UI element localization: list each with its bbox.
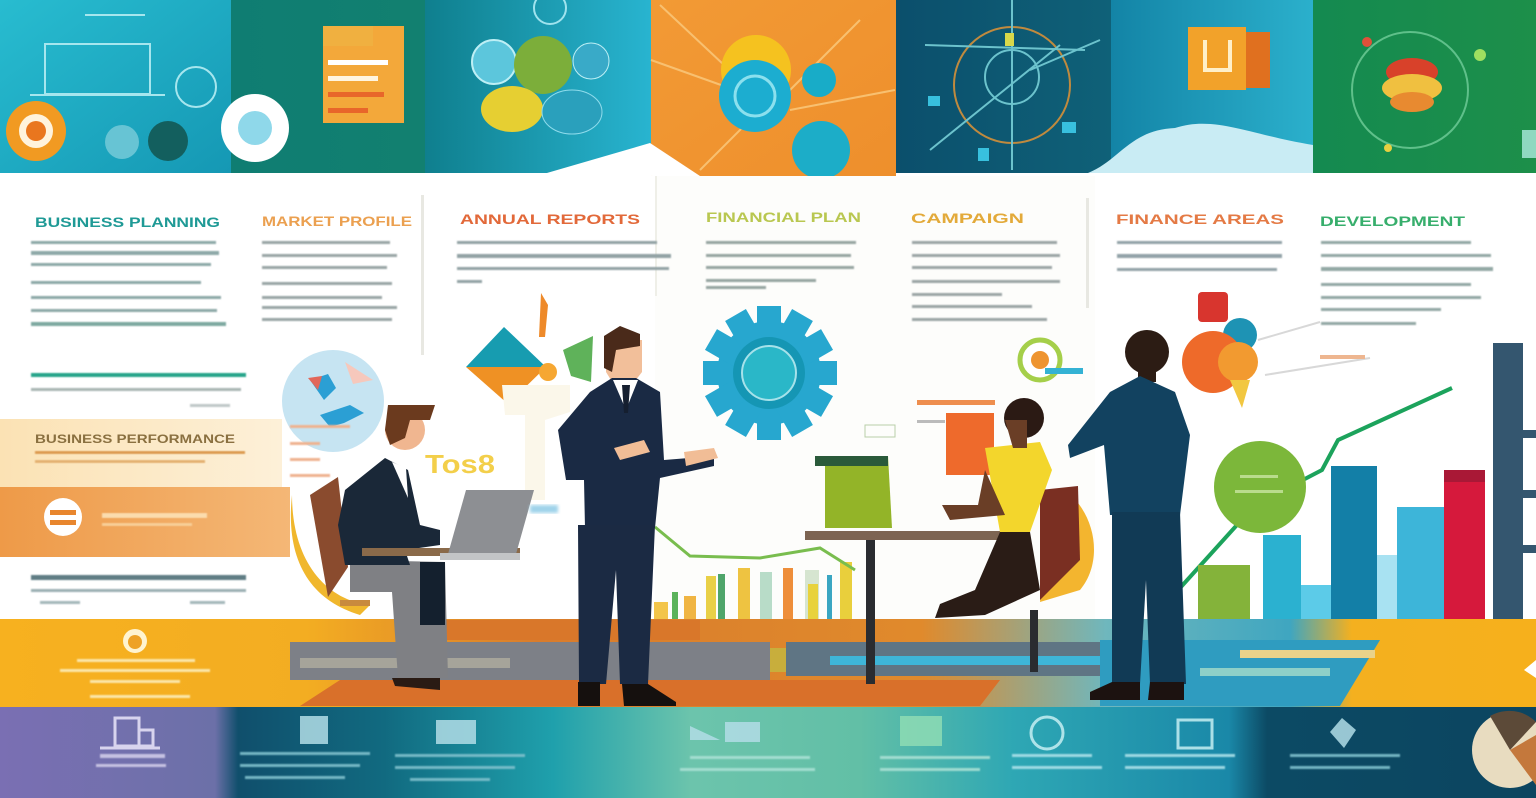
trousers [578, 525, 655, 684]
floor text block with icon [60, 629, 210, 698]
text block under callouts [31, 575, 246, 604]
icon: diamond chart [466, 293, 593, 404]
torso [338, 458, 440, 565]
desk [362, 548, 520, 556]
icon: right cluster infographic [1020, 292, 1370, 408]
column 6: heading and text: FINANCE AREAS [1116, 211, 1284, 227]
cloud [1088, 124, 1313, 173]
icon: orange box [1188, 27, 1270, 90]
white paper sheet edge [540, 143, 700, 176]
icon: venn circles [472, 0, 609, 134]
column 7: heading and text: DEVELOPMENT [1320, 213, 1466, 229]
orange document on stand [865, 400, 995, 475]
head [606, 340, 642, 385]
jacket [1068, 376, 1190, 515]
column 7: heading and text [1320, 213, 1493, 325]
icon: orange badge [6, 101, 66, 161]
figure: standing man back view [1068, 330, 1190, 700]
icon: globe [282, 350, 384, 452]
torso [985, 442, 1052, 532]
figure: seated man with laptop [291, 405, 558, 690]
icon: pie corner [1472, 711, 1536, 788]
green divider with small text [31, 373, 246, 407]
bar chart: small center [654, 527, 855, 626]
column 2: heading and text [262, 213, 412, 321]
figure: standing man in suit [558, 326, 718, 706]
panel: orange callout [0, 487, 290, 557]
figure: seated woman at desk [805, 398, 1094, 684]
shoes [1090, 682, 1140, 700]
chair [291, 495, 370, 615]
orange text notes near globe [290, 425, 350, 477]
icon: small circles [105, 94, 289, 162]
panel: peach callout [0, 419, 282, 487]
icon: document [323, 26, 404, 123]
icon: bottom laptop [100, 718, 160, 748]
desk and laptop [825, 456, 892, 528]
head [385, 410, 425, 450]
icon: green circle badge [1214, 441, 1306, 533]
column 4: heading and text [706, 209, 861, 289]
panel: peach callout: BUSINESS PERFORMANCE [35, 432, 235, 446]
icon: white fragment at right edge [1524, 660, 1536, 678]
bottom band [0, 707, 1536, 798]
column 2: heading and text: MARKET PROFILE [262, 213, 412, 229]
head [1125, 330, 1169, 374]
floor platforms [290, 620, 1380, 706]
icon: network diagram [925, 0, 1100, 170]
laptop [448, 490, 534, 554]
bottom caption lines [240, 752, 1400, 781]
column 1: heading and text: BUSINESS PLANNING [35, 214, 220, 230]
column 6: heading and text [1116, 211, 1284, 271]
top banner panels [0, 0, 1536, 179]
icon: laptop outline [30, 15, 216, 107]
column 1: heading and text [31, 214, 226, 326]
column 5: heading and text: CAMPAIGN [911, 210, 1024, 226]
legs [350, 560, 448, 678]
icon: orange panel circles [651, 5, 895, 179]
column 3: heading and text [457, 211, 671, 283]
shoes [578, 682, 600, 706]
yellow label: Tos8 [425, 449, 495, 479]
suit torso [558, 378, 714, 528]
pedestal [502, 385, 570, 500]
legs [935, 532, 1040, 618]
column 3: heading and text: ANNUAL REPORTS [460, 211, 640, 227]
bar chart: right growth [1180, 343, 1536, 619]
head [1004, 398, 1044, 438]
icon: bottom documents row [300, 716, 1356, 749]
floor band [0, 619, 1536, 707]
hands [614, 440, 650, 460]
column 5: heading and text [911, 210, 1060, 321]
icon: gear [703, 306, 837, 440]
column 4: heading and text: FINANCIAL PLAN [706, 209, 861, 225]
chair [1040, 488, 1094, 602]
trousers [1112, 512, 1186, 684]
arm [942, 470, 1005, 520]
icon: planet bowl [1352, 32, 1536, 158]
